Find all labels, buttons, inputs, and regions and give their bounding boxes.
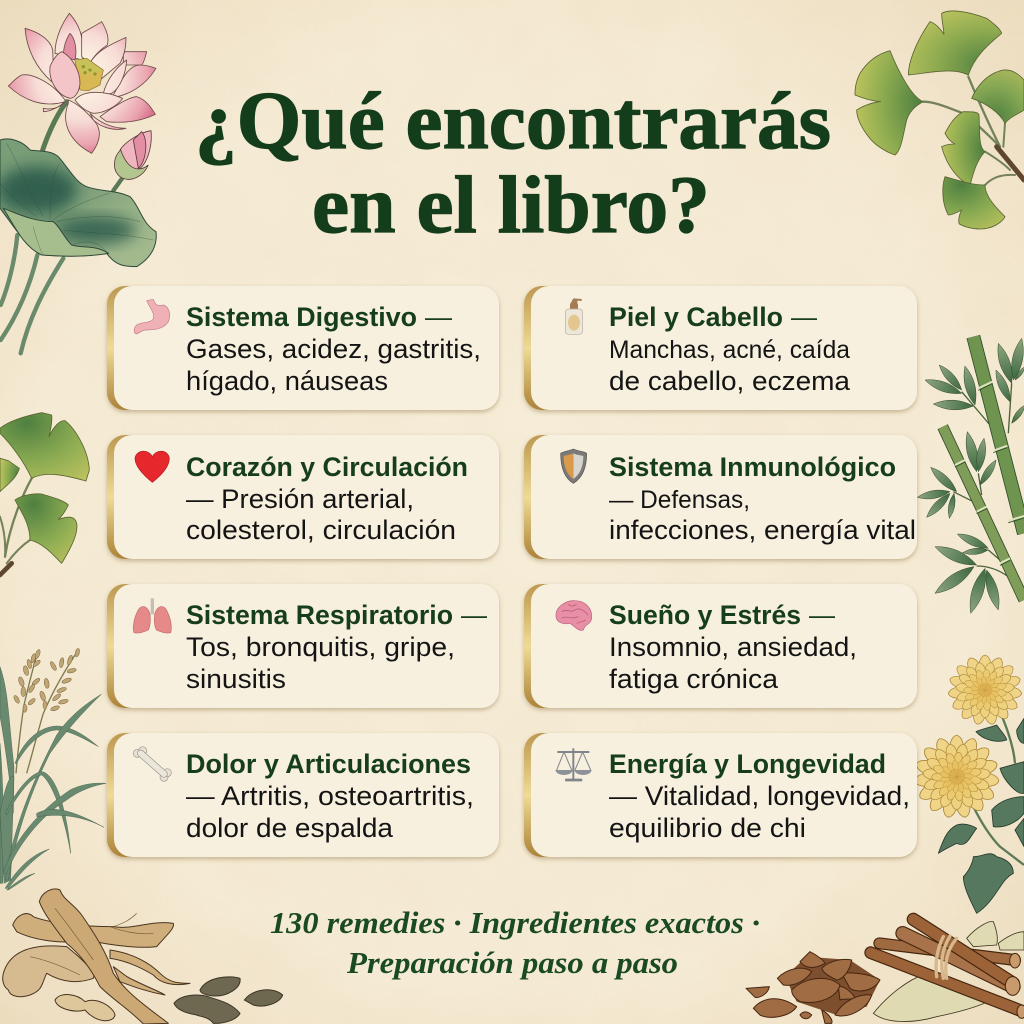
card text: Energía y Longevidad: — Vitalidad, longevidad, — [609, 781, 910, 811]
panel: Dolor y Articulaciones — [107, 733, 499, 857]
icon: shield — [561, 449, 587, 483]
card text: Sistema Digestivo: Sistema Digestivo — [186, 302, 417, 332]
card text: Sistema Respiratorio — [186, 600, 487, 694]
card text: Sistema Digestivo: — — [425, 302, 453, 332]
card text: Dolor y Articulaciones: — Artritis, osteoartritis, — [186, 781, 474, 811]
card text: Dolor y Articulaciones — [186, 749, 474, 843]
card text: Sueño y Estrés — [609, 600, 857, 694]
card text: Sueño y Estrés: fatiga crónica — [609, 664, 778, 694]
card text: Sistema Respiratorio: — — [461, 600, 487, 630]
icon: heart — [135, 451, 169, 482]
title — [195, 75, 831, 250]
card text: Piel y Cabello: de cabello, eczema — [609, 366, 850, 396]
card text: Sistema Respiratorio: Tos, bronquitis, gripe, — [186, 632, 455, 662]
icon: bone — [133, 747, 171, 781]
seed heads — [13, 648, 80, 712]
card text: Sistema Respiratorio: sinusitis — [186, 664, 286, 694]
card text: Energía y Longevidad: equilibrio de chi — [609, 813, 806, 843]
panel: Energía y Longevidad — [524, 733, 917, 857]
card text: Sistema Inmunológico — [609, 452, 916, 545]
icon: lungs — [133, 598, 171, 633]
card text: Sistema Digestivo: hígado, náuseas — [186, 366, 388, 396]
card text: Piel y Cabello: — — [791, 302, 817, 332]
card text: Piel y Cabello: Piel y Cabello — [609, 302, 783, 332]
footer tagline: 130 remedies · Ingredientes exactos · — [270, 905, 760, 940]
icon: stomach — [134, 299, 170, 334]
card text: Sistema Inmunológico: Sistema Inmunológico — [609, 452, 896, 482]
bamboo culms — [943, 337, 1024, 600]
brown nuts — [746, 952, 880, 1023]
card text: Dolor y Articulaciones: dolor de espalda — [186, 813, 393, 843]
panel: Piel y Cabello — [524, 286, 917, 410]
card text: Sistema Digestivo — [186, 302, 481, 396]
lotus leaf — [0, 139, 156, 267]
title: ¿Qué encontrarás — [195, 75, 831, 166]
card text: Sueño y Estrés: — — [809, 600, 835, 630]
footer tagline — [270, 905, 760, 980]
panel: Sistema Digestivo — [107, 286, 499, 410]
card text: Corazón y Circulación: — Presión arterial, — [186, 484, 414, 514]
illustration: ginkgo branch left — [0, 413, 89, 575]
lotus petals — [8, 13, 156, 153]
card text: Sistema Respiratorio: Sistema Respiratorio — [186, 600, 453, 630]
bay leaves — [873, 921, 1024, 1022]
cinnamon sticks — [871, 919, 1023, 1012]
icon: lotion bottle — [565, 298, 583, 334]
illustration: grass with seed heads — [0, 648, 106, 890]
illustration: lotus flower and leaf — [0, 13, 156, 353]
lotus seed pod — [75, 58, 103, 91]
icon: brain — [556, 601, 592, 630]
chrysanthemum flowers — [914, 655, 1022, 819]
bamboo leaves — [917, 337, 1024, 615]
illustration: bamboo right — [917, 337, 1024, 615]
panel: Sistema Respiratorio — [107, 584, 499, 708]
title: en el libro? — [312, 159, 710, 250]
card text: Energía y Longevidad — [609, 749, 910, 843]
chrysanthemum stems — [973, 703, 1024, 865]
illustration: chrysanthemum, cinnamon and nuts — [746, 655, 1024, 1023]
card text: Dolor y Articulaciones: Dolor y Articulaciones — [186, 749, 471, 779]
card text: Corazón y Circulación: colesterol, circulación — [186, 515, 456, 545]
panel: Sistema Inmunológico — [524, 435, 917, 559]
card text: Sistema Inmunológico: — Defensas, — [609, 486, 750, 514]
illustration: ginseng roots and stones — [3, 889, 283, 1024]
card text: Sueño y Estrés: Insomnio, ansiedad, — [609, 632, 857, 662]
card text: Energía y Longevidad: Energía y Longevidad — [609, 749, 886, 779]
chrysanthemum leaves — [938, 718, 1024, 913]
lotus front petals — [50, 33, 127, 113]
lotus bud — [114, 131, 151, 179]
card text: Piel y Cabello — [609, 302, 850, 396]
dark stones — [174, 977, 283, 1023]
illustration: ginkgo branch top right — [855, 11, 1024, 229]
grass blades — [0, 667, 106, 890]
footer tagline: Preparación paso a paso — [346, 945, 678, 980]
card text: Corazón y Circulación: Corazón y Circulación — [186, 452, 468, 482]
panel: Sueño y Estrés — [524, 584, 917, 708]
card text: Sueño y Estrés: Sueño y Estrés — [609, 600, 801, 630]
icon: balance scales — [555, 748, 592, 781]
card text: Sistema Digestivo: Gases, acidez, gastritis, — [186, 334, 481, 364]
panel: Corazón y Circulación — [107, 435, 499, 559]
card text: Corazón y Circulación — [186, 452, 468, 545]
cinnamon ends — [1005, 953, 1024, 1018]
card text: Piel y Cabello: Manchas, acné, caída — [609, 336, 850, 364]
card text: Sistema Inmunológico: infecciones, energía vital — [609, 515, 916, 545]
